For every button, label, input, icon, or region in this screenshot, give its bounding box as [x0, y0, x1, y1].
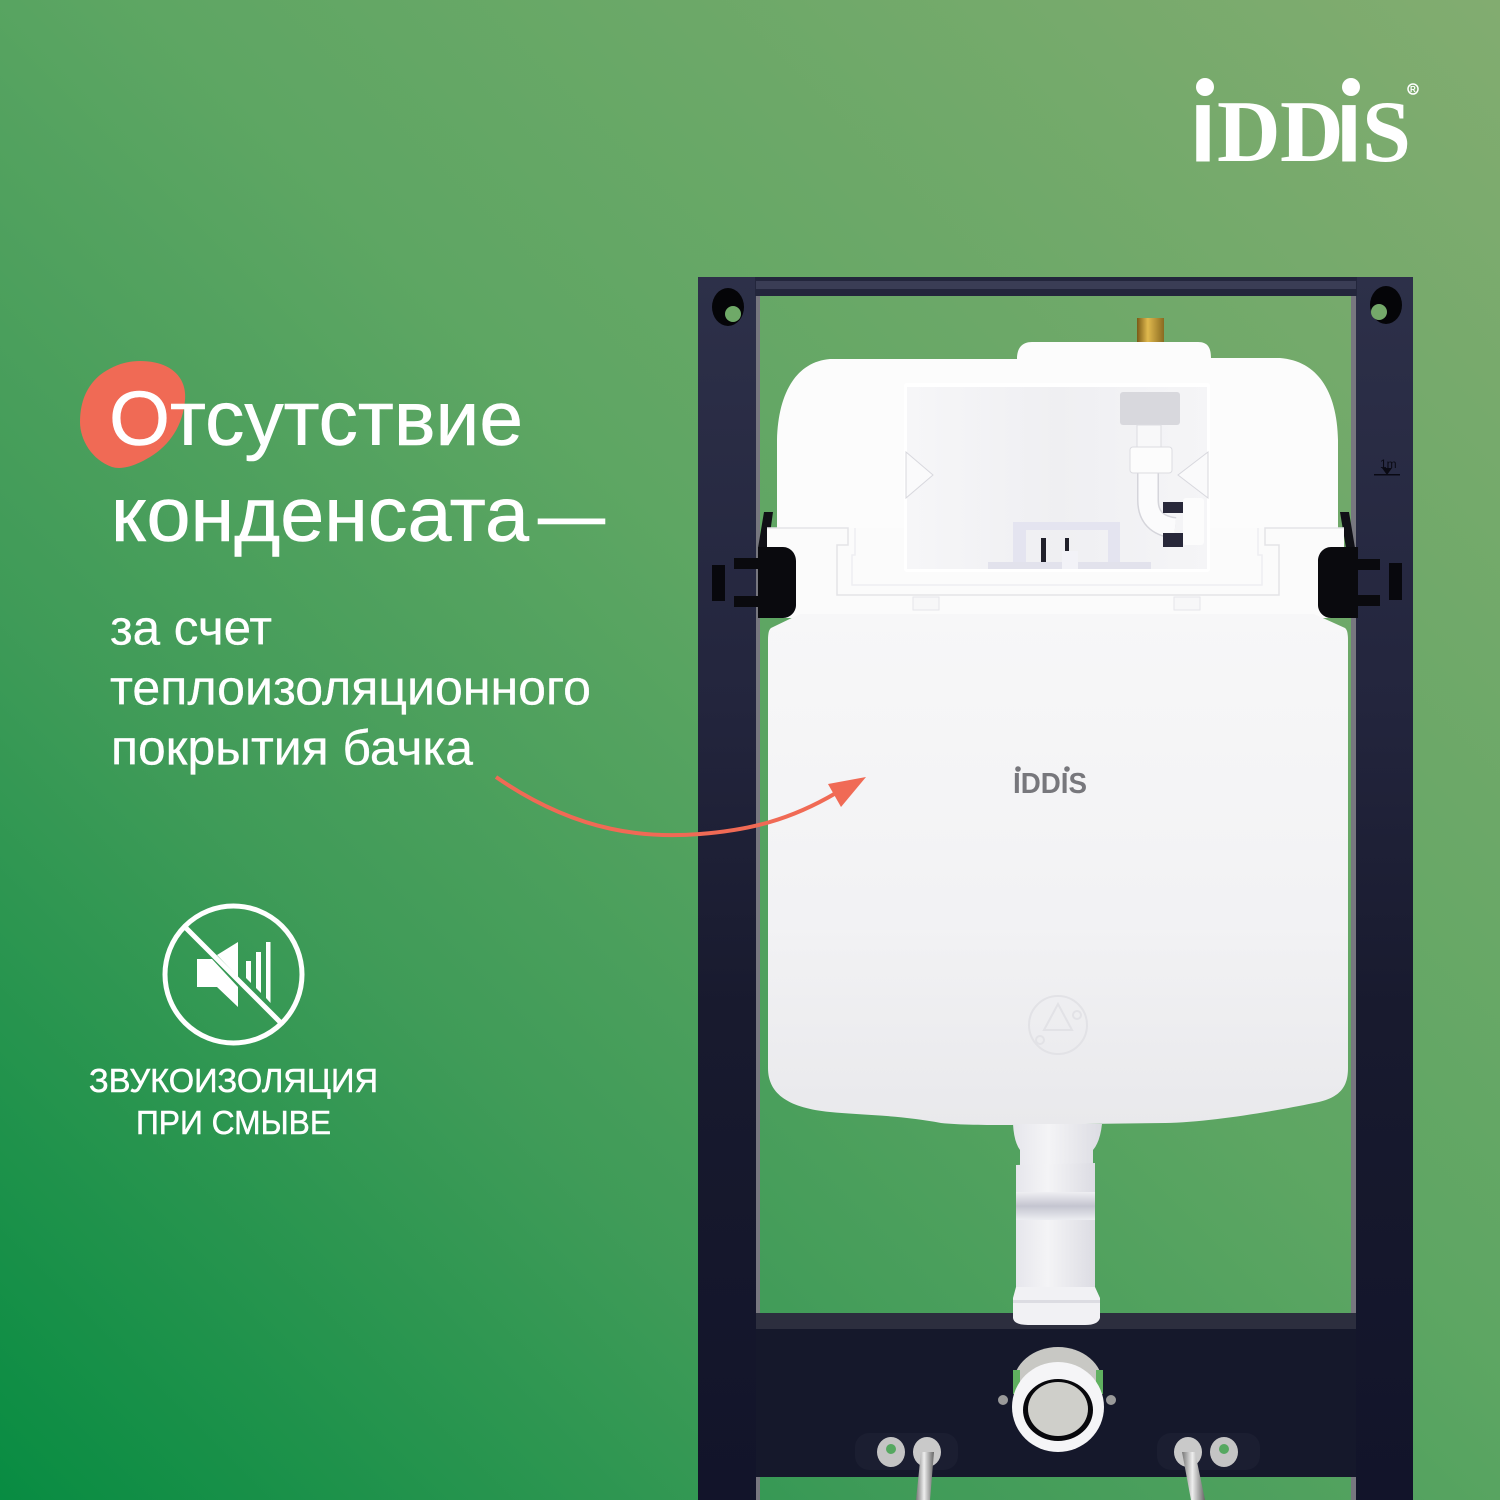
panel logo: IDDIS	[1013, 768, 1087, 800]
clip wedge: right	[1340, 512, 1355, 548]
logo: IDDIS: R	[1410, 85, 1416, 94]
icon label: ПРИ СМЫВЕ	[136, 1104, 331, 1141]
heading: конденсата	[111, 472, 529, 558]
service box recess	[904, 383, 1210, 572]
valve fitting	[1120, 392, 1204, 547]
embossed recycling mark	[1029, 996, 1087, 1054]
subheading text: покрытия бачка	[111, 722, 474, 776]
brass water inlet	[1137, 318, 1164, 343]
cistern upper body	[777, 342, 1338, 530]
clip: right	[1318, 547, 1380, 618]
product: installation frame with cistern	[698, 277, 1413, 1500]
subheading text: теплоизоляционного	[110, 662, 591, 716]
frame: columns and crossbars	[698, 277, 1413, 1500]
clip wedge: left	[758, 512, 773, 548]
arrow	[496, 777, 866, 835]
marking: 1m level	[1374, 457, 1400, 476]
heading: Отсутствие	[109, 376, 523, 462]
icon: muted speaker	[165, 906, 302, 1043]
heading	[109, 376, 605, 558]
marking: 1m level: 1m	[1380, 457, 1397, 471]
screw boss left	[906, 452, 933, 498]
icon label: ЗВУКОИЗОЛЯЦИЯ	[89, 1062, 378, 1099]
heading: —	[538, 472, 605, 558]
clip: left	[734, 547, 796, 618]
drain pipe	[1013, 1124, 1102, 1325]
logo: IDDIS	[1192, 78, 1418, 181]
screw boss right	[1178, 452, 1208, 498]
subheading text: за счет	[110, 602, 272, 656]
icon label	[89, 1062, 378, 1141]
bracket	[988, 522, 1151, 569]
coral blob accent	[80, 361, 185, 468]
mounting bolts and rods	[855, 1433, 1260, 1500]
cistern collar	[767, 528, 1344, 618]
flush outlet	[998, 1347, 1116, 1452]
logo: IDDIS: I	[1338, 88, 1360, 178]
logo: IDDIS: D	[1217, 84, 1281, 181]
subheading text	[110, 602, 591, 776]
logo: IDDIS: D	[1280, 84, 1344, 181]
logo: IDDIS: I	[1192, 88, 1214, 178]
insulation panel	[768, 614, 1348, 1125]
logo: IDDIS: S	[1362, 84, 1411, 181]
